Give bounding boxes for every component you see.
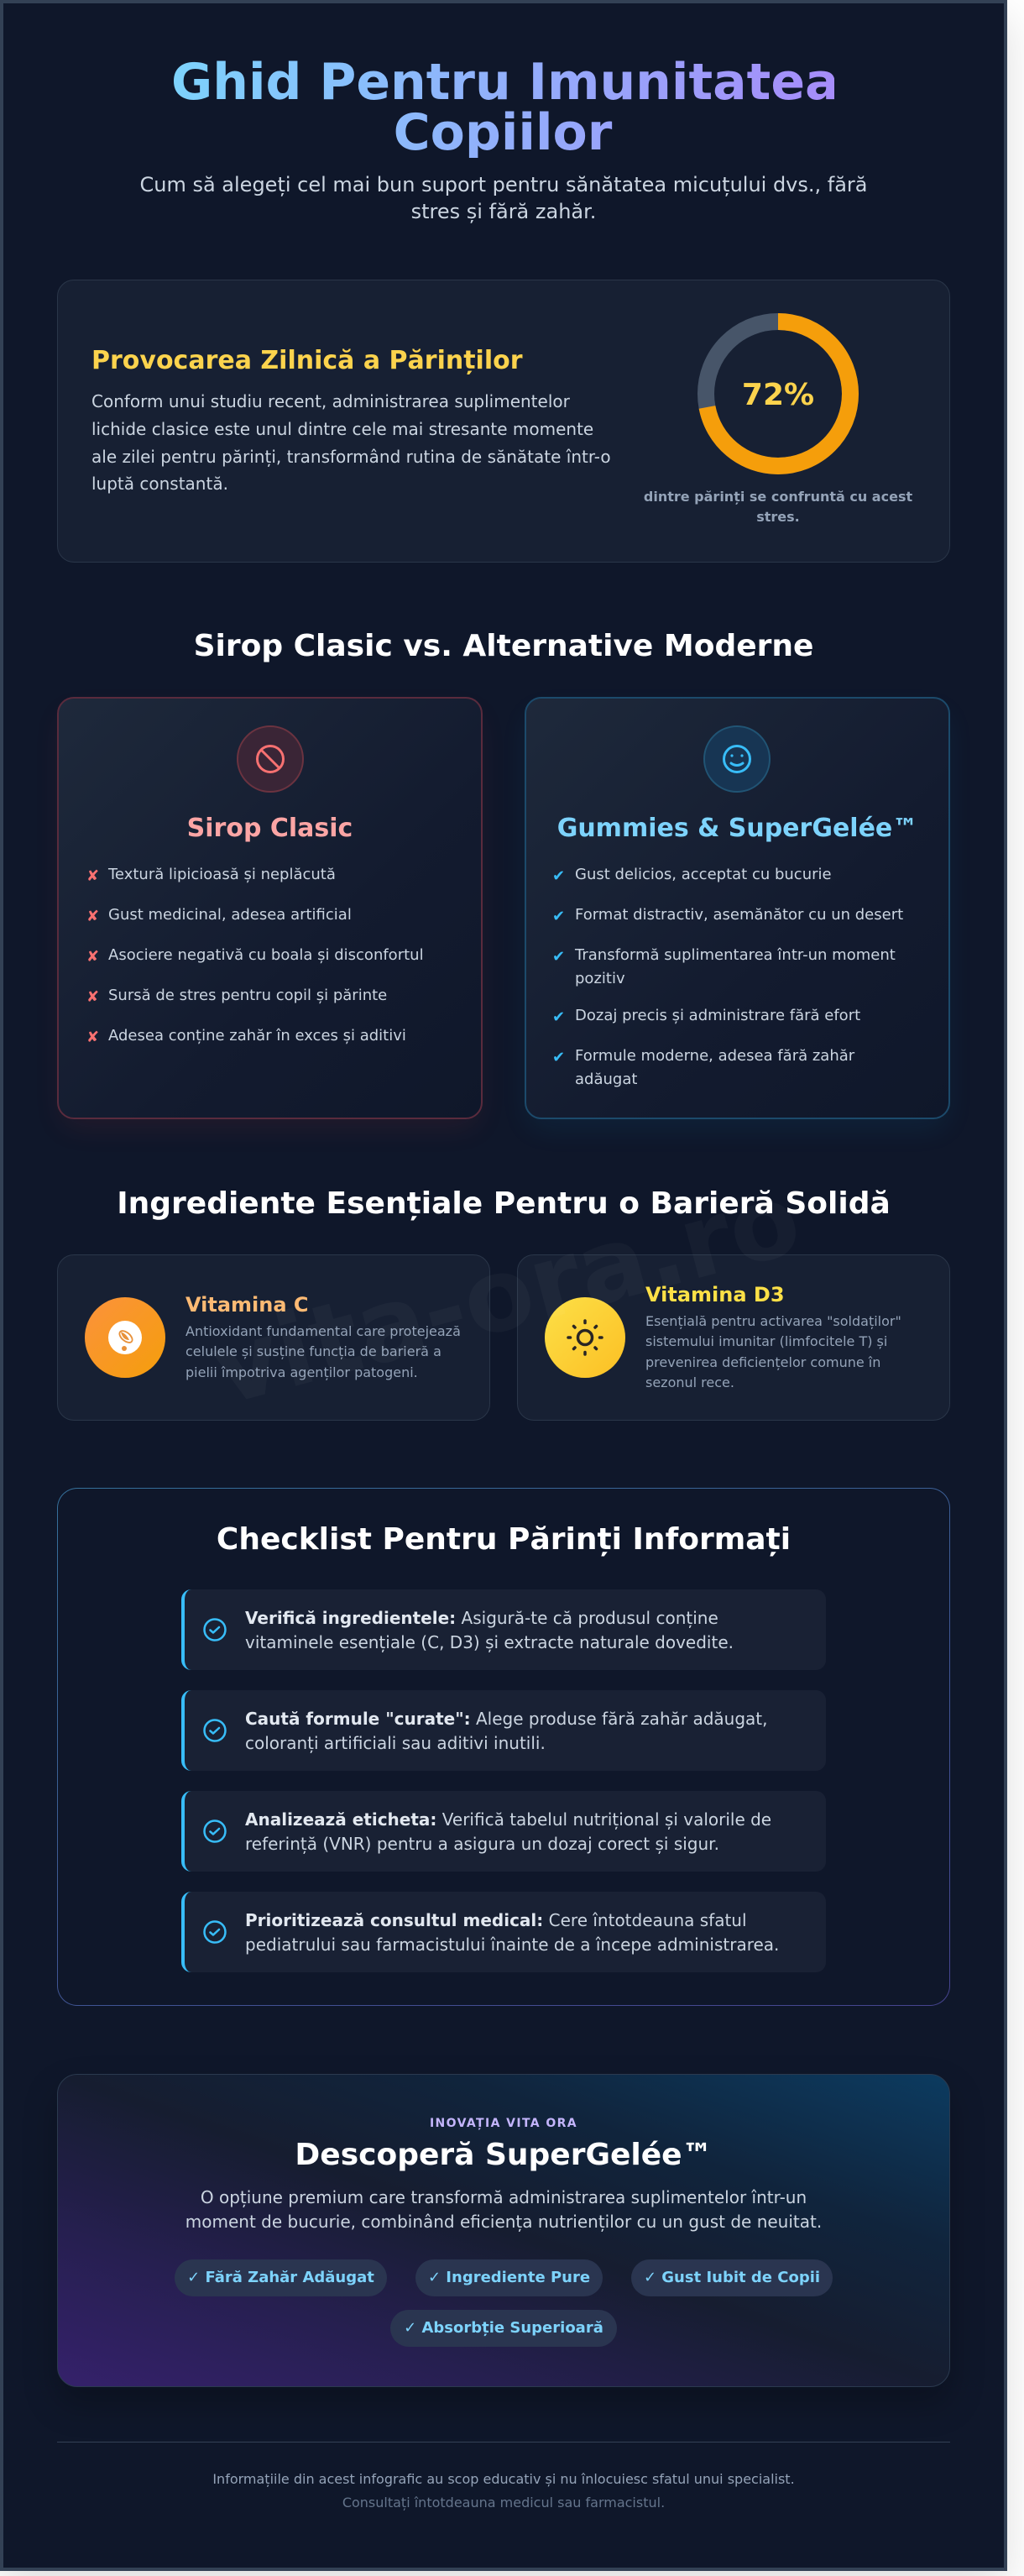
tag: pure ingredients: ✓ Ingrediente Pure xyxy=(428,2269,590,2286)
heading: comparison: Sirop Clasic vs. Alternative Moderne xyxy=(194,629,813,663)
panel: checklist xyxy=(57,1488,950,2006)
checklist item 3 xyxy=(181,1791,826,1872)
text: discover description: O opțiune premium care transformă administrarea suplimentelor într-un xyxy=(201,2187,807,2207)
tag: loved taste xyxy=(631,2259,833,2296)
checklist item 2: coloranți artificiali sau aditivi inutili. xyxy=(245,1733,546,1753)
heading: discover: Descoperă SuperGelée™ xyxy=(295,2138,713,2172)
list: gummies benefits: ✔ xyxy=(552,1049,565,1066)
text: vitamin D3 description: sezonul rece. xyxy=(645,1374,734,1390)
tag: no sugar: ✓ Fără Zahăr Adăugat xyxy=(187,2269,374,2286)
icon: prohibited xyxy=(237,725,304,793)
tag: no sugar xyxy=(175,2259,387,2296)
list: gummies benefits: Transformă suplimentarea într-un moment xyxy=(575,946,896,964)
list: classic syrup drawbacks xyxy=(86,866,424,1046)
heading: challenge: Provocarea Zilnică a Părinților xyxy=(91,346,523,375)
heading: classic syrup: Sirop Clasic xyxy=(187,814,353,843)
text: disclaimer: Informațiile din acest infografic au scop educativ și nu înlocuiesc sfatul unui specialist. xyxy=(212,2471,795,2487)
text: challenge body xyxy=(91,391,611,494)
text: donut caption xyxy=(644,489,912,525)
list: classic syrup drawbacks: Asociere negativă cu boala și disconfortul xyxy=(108,946,424,964)
text: discover description: moment de bucurie, combinând eficiența nutrienților cu un gust de neuitat. xyxy=(185,2212,822,2232)
list: classic syrup drawbacks: ✘ xyxy=(86,948,99,966)
list: gummies benefits: Formule moderne, adesea fără zahăr xyxy=(575,1047,854,1065)
text: donut caption: stres. xyxy=(756,509,800,525)
subtitle: Cum să alegeți cel mai bun suport pentru sănătatea micuțului dvs., fără xyxy=(139,173,868,196)
list: gummies benefits xyxy=(552,866,903,1088)
text: discover description xyxy=(185,2187,822,2232)
subtitle: stres și fără zahăr. xyxy=(411,200,596,223)
text: vitamin C description: celulele și susține funcția de barieră a xyxy=(185,1343,441,1359)
list: classic syrup drawbacks: ✘ xyxy=(86,988,99,1006)
checklist item 2 xyxy=(181,1690,826,1771)
chart: 72% donut: 72% xyxy=(742,378,814,412)
list: classic syrup drawbacks: Textură lipicioasă și neplăcută xyxy=(108,866,336,883)
text: challenge body: ale zilei pentru părinți, transformând rutina de sănătate într-o xyxy=(91,447,611,467)
tag: absorption: ✓ Absorbție Superioară xyxy=(404,2319,603,2337)
heading: vitamin D3: Vitamina D3 xyxy=(645,1283,785,1306)
list: classic syrup drawbacks: Gust medicinal, adesea artificial xyxy=(108,906,352,924)
text: challenge body: lichide clasice este unul dintre cele mai stresante momente xyxy=(91,419,593,439)
list: gummies benefits: Dozaj precis și administrare fără efort xyxy=(575,1007,860,1024)
text: vitamin D3 description: Esențială pentru activarea "soldaților" xyxy=(645,1313,901,1329)
text: vitamin D3 description: prevenirea deficiențelor comune în xyxy=(645,1354,880,1370)
checklist item 4 xyxy=(181,1892,826,1972)
list: gummies benefits: Format distractiv, asemănător cu un desert xyxy=(575,906,903,924)
checklist item 3: referință (VNR) pentru a asigura un dozaj corect și sigur. xyxy=(245,1834,719,1854)
text: donut caption: dintre părinți se confruntă cu acest xyxy=(644,489,912,505)
list: gummies benefits: ✔ xyxy=(552,948,565,966)
heading: checklist: Checklist Pentru Părinți Informați xyxy=(217,1522,791,1557)
list: gummies benefits: ✔ xyxy=(552,908,565,925)
checklist item 4: pediatrului sau farmacistului înainte de a începe administrarea. xyxy=(245,1935,779,1955)
list: classic syrup drawbacks: Sursă de stres pentru copil și părinte xyxy=(108,987,387,1004)
heading: ingredients: Ingrediente Esențiale Pentru o Barieră Solidă xyxy=(117,1186,891,1221)
chart: 72% donut xyxy=(697,313,859,474)
text: vitamin C description xyxy=(185,1323,461,1380)
subtitle xyxy=(139,173,868,223)
text: consult note: Consultați întotdeauna medicul sau farmacistul. xyxy=(342,2495,665,2511)
list: gummies benefits: ✔ xyxy=(552,1008,565,1026)
footer xyxy=(57,2442,950,2517)
text: vitamin C description: Antioxidant fundamental care protejează xyxy=(185,1323,461,1339)
list: gummies benefits: Gust delicios, acceptat cu bucurie xyxy=(575,866,832,883)
list: classic syrup drawbacks: Adesea conține zahăr în exces și aditivi xyxy=(108,1027,406,1045)
checklist item 1: vitaminele esențiale (C, D3) și extracte naturale dovedite. xyxy=(245,1632,734,1652)
text: challenge body: Conform unui studiu recent, administrarea suplimentelor xyxy=(91,391,570,411)
tag: absorption xyxy=(390,2310,617,2347)
list: gummies benefits: adăugat xyxy=(575,1071,637,1088)
text: vitamin C description: pielii împotriva agenților patogeni. xyxy=(185,1364,418,1380)
panel: daily challenge xyxy=(57,280,950,563)
heading: vitamin C: Vitamina C xyxy=(185,1293,309,1317)
label: innovation: INOVAȚIA VITA ORA xyxy=(430,2117,577,2130)
text: vitamin D3 description: sistemului imunitar (limfocitele T) și xyxy=(645,1333,887,1349)
panel: vitamin C xyxy=(57,1254,490,1421)
list: gummies benefits: pozitiv xyxy=(575,970,625,987)
checklist item 3: Analizează eticheta: Verifică tabelul nutrițional și valorile de xyxy=(245,1809,771,1830)
icon: vitamin D3 sun xyxy=(545,1297,625,1378)
checklist item 2: Caută formule "curate": Alege produse fără zahăr adăugat, xyxy=(245,1709,767,1729)
panel: discover supergelee xyxy=(57,2074,950,2392)
panel: vitamin D3 xyxy=(517,1254,950,1421)
tag: pure ingredients xyxy=(415,2259,603,2296)
list: classic syrup drawbacks: ✘ xyxy=(86,1029,99,1046)
list: classic syrup drawbacks: ✘ xyxy=(86,867,99,885)
checklist item 4: Prioritizează consultul medical: Cere întotdeauna sfatul xyxy=(245,1910,747,1930)
text: challenge body: luptă constantă. xyxy=(91,474,228,494)
panel: classic syrup xyxy=(57,697,483,1129)
checklist item 1: Verifică ingredientele: Asigură-te că produsul conține xyxy=(245,1608,718,1628)
title: Ghid Pentru Imunitatea xyxy=(171,53,839,112)
list: gummies benefits: ✔ xyxy=(552,867,565,885)
title: Copiilor xyxy=(394,103,612,162)
heading: gummies: Gummies & SuperGelée™ xyxy=(557,814,917,843)
title xyxy=(171,57,834,158)
text: vitamin D3 description xyxy=(645,1313,901,1390)
panel: gummies and supergelee xyxy=(525,697,950,1127)
icon: smile xyxy=(703,725,771,793)
list: classic syrup drawbacks: ✘ xyxy=(86,908,99,925)
tag: loved taste: ✓ Gust Iubit de Copii xyxy=(644,2269,820,2286)
icon: vitamin C orange xyxy=(85,1297,165,1378)
checklist item 1 xyxy=(181,1589,826,1670)
watermark: vita-ora.ro xyxy=(200,1160,812,1428)
